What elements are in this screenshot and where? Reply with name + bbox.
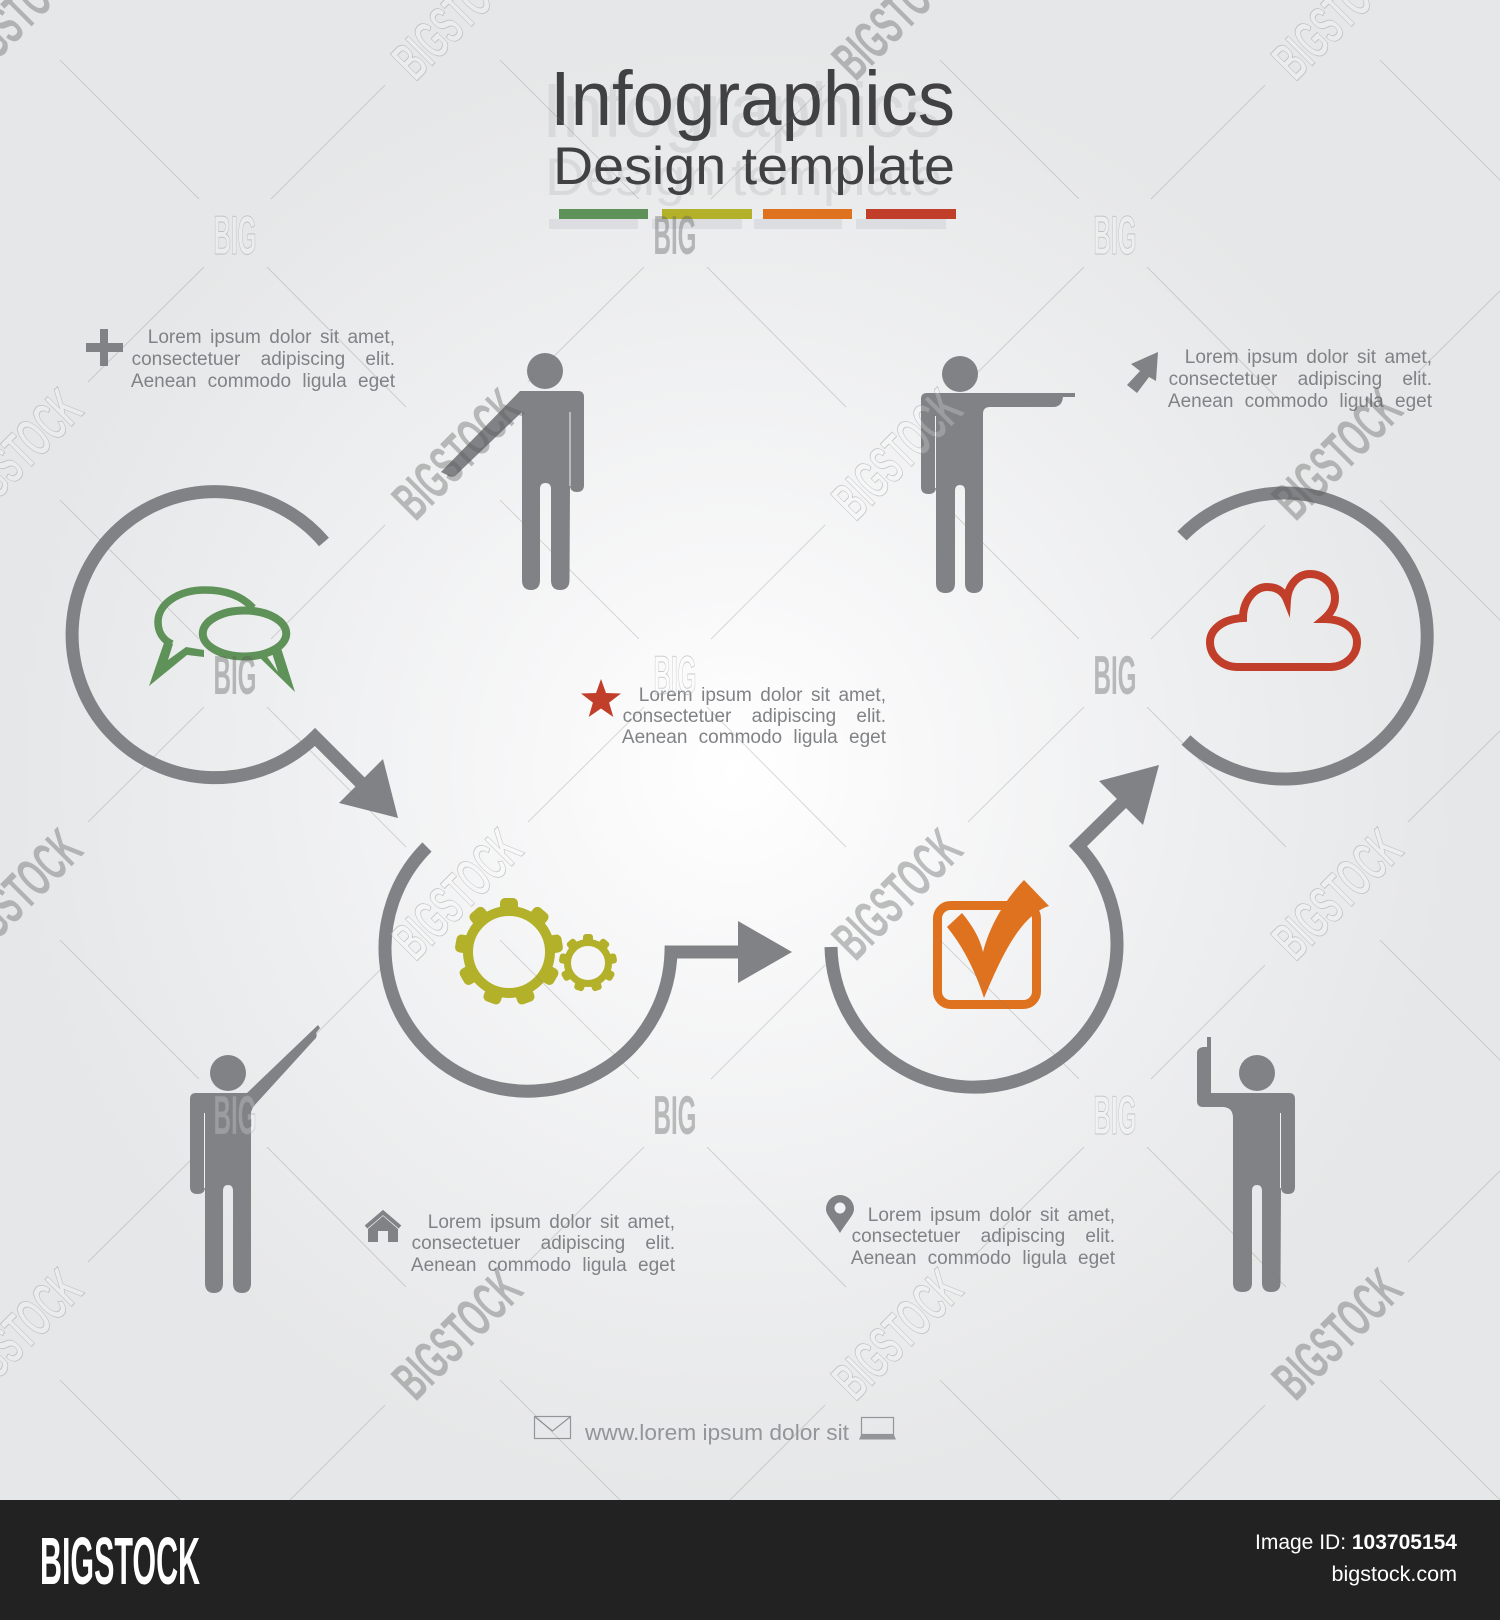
footer bar: BIGSTOCK	[40, 1524, 200, 1599]
infographic canvas: BIG	[1094, 644, 1136, 706]
footer bar: Image ID: 103705154	[1255, 1531, 1457, 1554]
watermark BIG labels: BIG	[214, 644, 256, 706]
title shadow	[542, 68, 942, 207]
watermark BIG labels: BIG	[654, 1084, 696, 1146]
text block: star: consectetuer adipiscing elit.	[623, 706, 886, 727]
text block: map pin: consectetuer adipiscing elit.	[852, 1226, 1115, 1247]
icon: cloud	[1210, 574, 1357, 667]
watermark BIG labels: BIG	[214, 1084, 256, 1146]
text block: plus: Aenean commodo ligula eget	[131, 371, 396, 392]
text block: plus	[86, 327, 396, 392]
title shadow: Design template	[545, 148, 942, 207]
watermark BIG labels: BIG	[654, 644, 696, 706]
infographic canvas: BIG	[1094, 1084, 1136, 1146]
text block: house: Lorem ipsum dolor sit amet,	[428, 1212, 675, 1233]
circle arrow 1	[72, 492, 398, 818]
text block: arrow: Aenean commodo ligula eget	[1168, 391, 1433, 412]
footer bar: bigstock.com	[1332, 1562, 1457, 1586]
website line with icons: www.lorem ipsum dolor sit	[584, 1420, 849, 1445]
title: Infographics	[550, 56, 955, 142]
watermark BIGSTOCK labels: BIGSTOCK	[380, 1257, 534, 1411]
text block: map pin: Aenean commodo ligula eget	[851, 1248, 1116, 1269]
person pointing up-right	[190, 1025, 320, 1293]
text block: arrow	[1127, 347, 1433, 412]
infographic canvas: BIG	[1094, 204, 1136, 266]
title	[550, 56, 955, 196]
watermark BIGSTOCK labels: BIGSTOCK	[820, 1257, 974, 1411]
text block: star: Lorem ipsum dolor sit amet,	[639, 685, 886, 706]
circle arrow 3	[831, 765, 1159, 1087]
text block: plus: consectetuer adipiscing elit.	[132, 349, 395, 370]
colour bars under title	[549, 209, 956, 229]
text block: house: Aenean commodo ligula eget	[411, 1255, 676, 1276]
watermark BIG labels: BIG	[214, 204, 256, 266]
text block: house	[366, 1212, 676, 1276]
circle arrow 2	[385, 847, 792, 1091]
circle 4	[1182, 493, 1427, 779]
person pointing down-left	[441, 353, 584, 590]
text block: plus: Lorem ipsum dolor sit amet,	[148, 327, 395, 348]
watermark BIGSTOCK labels: BIGSTOCK	[820, 817, 974, 971]
text block: arrow: Lorem ipsum dolor sit amet,	[1185, 347, 1432, 368]
title shadow: Infographics	[542, 68, 941, 154]
text block: star: Aenean commodo ligula eget	[622, 727, 887, 748]
watermark BIG labels: BIG	[654, 204, 696, 266]
watermark BIGSTOCK labels: BIGSTOCK	[820, 377, 974, 531]
icon: chat bubbles	[149, 590, 295, 692]
title: Design template	[553, 137, 955, 196]
person with raised hand	[1197, 1037, 1295, 1292]
icon: checkbox	[938, 880, 1049, 1004]
footer bar	[0, 1500, 1500, 1620]
website line with icons	[534, 1416, 896, 1445]
watermark BIG labels	[214, 204, 1136, 1146]
icon: gears	[454, 898, 617, 1006]
text block: map pin	[826, 1195, 1116, 1269]
text block: map pin: Lorem ipsum dolor sit amet,	[868, 1205, 1115, 1226]
watermark BIGSTOCK labels: BIGSTOCK	[380, 817, 534, 971]
text block: arrow: consectetuer adipiscing elit.	[1169, 369, 1432, 390]
text block: house: consectetuer adipiscing elit.	[412, 1233, 675, 1254]
text block: star	[581, 679, 887, 748]
person pointing right	[921, 356, 1075, 593]
watermark BIGSTOCK labels: BIGSTOCK	[380, 377, 534, 531]
